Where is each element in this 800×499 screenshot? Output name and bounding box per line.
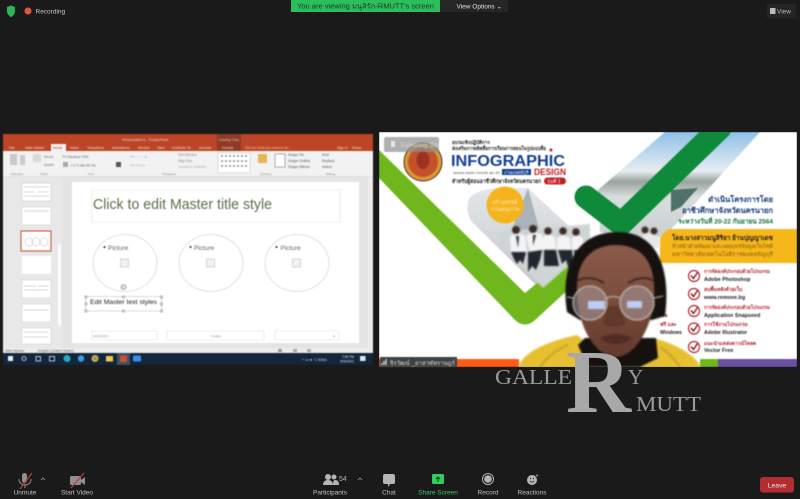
footer placeholders: [92, 331, 339, 340]
check item: Vector Free: Vector Free: [704, 348, 733, 354]
status bar: Slide Master: [5, 349, 25, 353]
partially hidden item text: ฟรี และ: [660, 321, 677, 328]
Windows taskbar: 9/30/2021: [340, 360, 354, 364]
poster headline: รุ่นที่ 1: [547, 178, 561, 185]
PowerPoint ribbon: Editing: [326, 172, 336, 176]
watermark: Gallery RMUTT: R: [566, 333, 632, 432]
scroll bar: [368, 177, 373, 348]
banner: viewing screen notice: You are viewing มนูสิรัก-RMUTT's screen: [297, 2, 434, 10]
PowerPoint ribbon: Text Direction: [178, 153, 198, 157]
control: share screen: Share Screen: [418, 490, 458, 496]
PowerPoint title bar: Home: [53, 146, 62, 150]
control: chat: [382, 474, 396, 496]
yellow speaker band: [660, 229, 797, 263]
camera name tag: poster panel: [384, 137, 439, 152]
poster headline: งานแพทย์บุรี: [504, 169, 529, 176]
selected text box: [85, 284, 162, 312]
control: participants: [313, 474, 362, 496]
yellow speaker band: มหาวิทยาลัยเทคโนโลยีราชมงคลธัญบุรี: [672, 250, 773, 258]
status bar: [3, 348, 373, 353]
leave button: Leave: [768, 482, 786, 490]
PowerPoint title bar: Drawing Tools: [219, 138, 239, 142]
PowerPoint title bar: File: [9, 146, 15, 150]
PowerPoint ribbon: Clipboard: [10, 172, 23, 176]
PowerPoint ribbon: Paragraph: [162, 172, 176, 176]
PowerPoint title bar: View: [157, 146, 165, 150]
presenter facial features: [603, 306, 626, 327]
PowerPoint ribbon: Find: [322, 153, 329, 157]
PowerPoint title bar: Slide Master: [25, 146, 45, 150]
banner: viewing screen notice: View Options ⌄: [456, 4, 502, 10]
yellow speaker band: โดย.นางสาวมนูสิริยา ย้านปุญญาเดช: [671, 233, 774, 243]
check item: Adobe Illustrator: Adobe Illustrator: [704, 330, 748, 336]
bottom toolbar: [14, 473, 794, 496]
PowerPoint title bar: Share: [352, 146, 361, 150]
check item: Adobe Photoshop: [688, 268, 770, 283]
PowerPoint ribbon: Convert to SmartArt: [178, 165, 206, 169]
slide canvas: [72, 182, 359, 343]
control: reactions: Reactions: [518, 490, 547, 496]
PowerPoint ribbon: Align Text: [178, 159, 192, 163]
photo band: sky and building: [598, 132, 760, 240]
footer placeholders: 9/30/2021: [93, 334, 109, 338]
check item: Vector Free: [688, 340, 756, 354]
icon: recording dot: [24, 8, 32, 14]
Windows taskbar: 1:56 PM: [342, 355, 354, 359]
control: unmute: [14, 473, 45, 496]
PowerPoint title bar: [3, 134, 373, 151]
banner: viewing screen notice: [291, 0, 508, 12]
photo block: dark building windows: [671, 188, 698, 212]
light green check mark: [379, 150, 570, 324]
picture placeholder circles: Picture: [194, 245, 215, 252]
partially hidden item text: [660, 313, 682, 336]
poster headline: อบรมเชิงปฏิบัติการ: [452, 139, 490, 146]
presenter name tag: [380, 357, 457, 367]
PowerPoint title bar: Presentation1 - PowerPoint: [122, 138, 169, 142]
PowerPoint ribbon: ≡ ≡ ⇔ ⇔ ‖: [130, 155, 147, 159]
students: shirts: [510, 232, 584, 252]
check item: remove.bg: www.remove.bg: [703, 295, 745, 301]
presenter collar: [578, 338, 658, 367]
control: record: Record: [478, 490, 499, 496]
picture placeholder circles: Picture: [108, 245, 129, 252]
poster headline: สำหรับผู้สอนอาชีวศึกษาจังหวัดนครนายก: [452, 177, 542, 186]
check item: Adobe Photoshop: การจัดองค์ประกอบด้วยโปรแกรม: [704, 268, 770, 275]
view button: [767, 4, 796, 18]
poster headline: www.web.rmutt.ac.th: [453, 170, 500, 175]
status bar: English (United States): [38, 349, 74, 353]
presenter hair: [565, 232, 666, 320]
PowerPoint title bar: Insert: [70, 146, 79, 150]
PowerPoint title bar: Animations: [112, 146, 130, 150]
PowerPoint title bar: Sign in: [337, 146, 348, 150]
thumbnail pane: [3, 177, 62, 348]
watermark: Gallery RMUTT: MUTT: [636, 392, 701, 416]
control: start video: Start Video: [61, 490, 93, 496]
control: participants: 54: [339, 476, 347, 483]
poster headline: ส่งเสริมการผลิตสื่อการเรียนการสอนในรูปแบบสื่อ: [452, 144, 546, 153]
PowerPoint ribbon: Drawing: [260, 172, 271, 176]
control: participants: Participants: [313, 490, 348, 496]
selected text box: Edit Master text styles: [90, 299, 158, 306]
PowerPoint ribbon: Shape Outline: [288, 159, 310, 163]
leave button: [760, 477, 794, 492]
students: ties: [516, 235, 536, 248]
check item: Snapseed: การจัดองค์ประกอบด้วยโปรแกรม: [704, 304, 770, 311]
PowerPoint ribbon: Shape Effects: [288, 165, 310, 169]
check item: Vector Free: แนะนำแหล่งดาวน์โหลด: [704, 340, 756, 347]
footer placeholders: #: [333, 334, 335, 338]
control: share screen: [418, 474, 458, 496]
dark green check mark: [586, 128, 720, 224]
yellow circle badge: งานคุณภาพ: [491, 207, 520, 213]
PowerPoint ribbon: TH Sarabun PSK: [62, 155, 90, 159]
check item: Snapseed: [688, 304, 770, 319]
poster headline: INFOGRAPHIC: [451, 153, 565, 170]
top bar: recording status: [7, 6, 66, 17]
project host text: ดำเนินโครงการโดย: [708, 194, 773, 204]
check item: Snapseed: Application Snapseed: [704, 313, 760, 319]
PowerPoint ribbon: Delete: [44, 163, 54, 167]
recording label: Recording: [36, 8, 66, 16]
PowerPoint ribbon: Select: [322, 165, 332, 169]
panel: PowerPoint shared screen: [3, 134, 373, 365]
PowerPoint title bar: Review: [138, 146, 150, 150]
PowerPoint title bar: EndNote X9: [172, 146, 191, 150]
check item: Adobe Illustrator: [688, 321, 748, 336]
logo seal: [404, 143, 442, 181]
students: right pair: [640, 233, 660, 248]
master title placeholder: [92, 190, 340, 222]
presenter shirt: [518, 335, 701, 367]
Windows taskbar: ^ ▭ ♦ ◁ ENG: [302, 357, 327, 362]
presenter on webcam: [518, 232, 701, 367]
PowerPoint ribbon: [3, 151, 373, 177]
check item: Adobe Photoshop: Adobe Photoshop: [704, 277, 751, 283]
presenter face: [577, 245, 654, 357]
PowerPoint ribbon: Shape Fill: [288, 153, 304, 157]
students: skirts and trousers: [511, 250, 584, 272]
PowerPoint ribbon: I U S abc AV Aa: [71, 164, 96, 168]
PowerPoint title bar: Transitions: [87, 146, 104, 150]
control: reactions: [518, 474, 547, 496]
PowerPoint title bar: Acrobat: [199, 146, 211, 150]
watermark: Gallery RMUTT: GALLE: [495, 365, 572, 389]
control: record: [478, 474, 499, 496]
presenter name tag: จิรวัฒน์ _อาสาฬหราษฎร์: [390, 359, 456, 367]
view button: View: [777, 8, 791, 16]
panel: Infographic Design poster with presenter: [379, 128, 797, 367]
yellow circle badge: [486, 186, 524, 224]
check item: remove.bg: [688, 284, 745, 301]
watermark: Gallery RMUTT: Y: [628, 365, 643, 389]
photo wedge: building at left: [467, 188, 568, 284]
camera name tag: poster panel: Samsung Sm: [400, 142, 439, 149]
group of students photo: [496, 224, 660, 288]
PowerPoint title bar: Tell me what you want to do...: [245, 146, 291, 150]
yellow circle badge: สร้างสรรค์: [492, 199, 518, 206]
project host text: ระหว่างวันที่ 20-22 กันยายน 2564: [678, 216, 773, 226]
students: heads: [512, 226, 520, 234]
watermark: Gallery RMUTT: [495, 333, 701, 432]
check item: Adobe Illustrator: การใช้งานโปรแกรม: [704, 321, 748, 328]
control: unmute: Unmute: [14, 490, 37, 496]
picture placeholder circles: Picture: [280, 245, 301, 252]
PowerPoint ribbon: Slides: [40, 172, 49, 176]
partially hidden item text: es: [662, 313, 668, 319]
footer placeholders: Footer: [211, 334, 222, 338]
project host text: อาชีวศึกษาจังหวัดนครนายก: [682, 206, 773, 215]
control: chat: Chat: [382, 490, 396, 496]
partially hidden item text: Windows: [660, 330, 682, 336]
topic checklist: [660, 268, 770, 354]
PowerPoint ribbon: Replace: [322, 159, 335, 163]
Windows taskbar: [3, 353, 373, 365]
poster headline: DESIGN: [534, 167, 566, 178]
presenter glasses: [567, 286, 663, 320]
master title placeholder: Click to edit Master title style: [93, 196, 272, 213]
project host text: [678, 194, 773, 226]
control: start video: [61, 473, 93, 496]
PowerPoint ribbon: Reset: [44, 155, 53, 159]
colour stripe footer: [379, 359, 797, 367]
poster headline: [451, 139, 566, 186]
PowerPoint ribbon: Font: [88, 172, 94, 176]
PowerPoint title bar: Format: [222, 146, 233, 150]
yellow speaker band: หัวหน้าฝ่ายพัฒนาและเผยแพร่ข้อมูลเว็บไซต์: [672, 242, 773, 250]
icon: security shield: [7, 6, 15, 17]
check item: remove.bg: ลบพื้นหลังด้วยเว็บ: [704, 284, 742, 293]
picture placeholder circles: [93, 234, 329, 292]
PowerPoint ribbon: ≡ ≡ ≡ ≡ ▭: [130, 164, 146, 168]
